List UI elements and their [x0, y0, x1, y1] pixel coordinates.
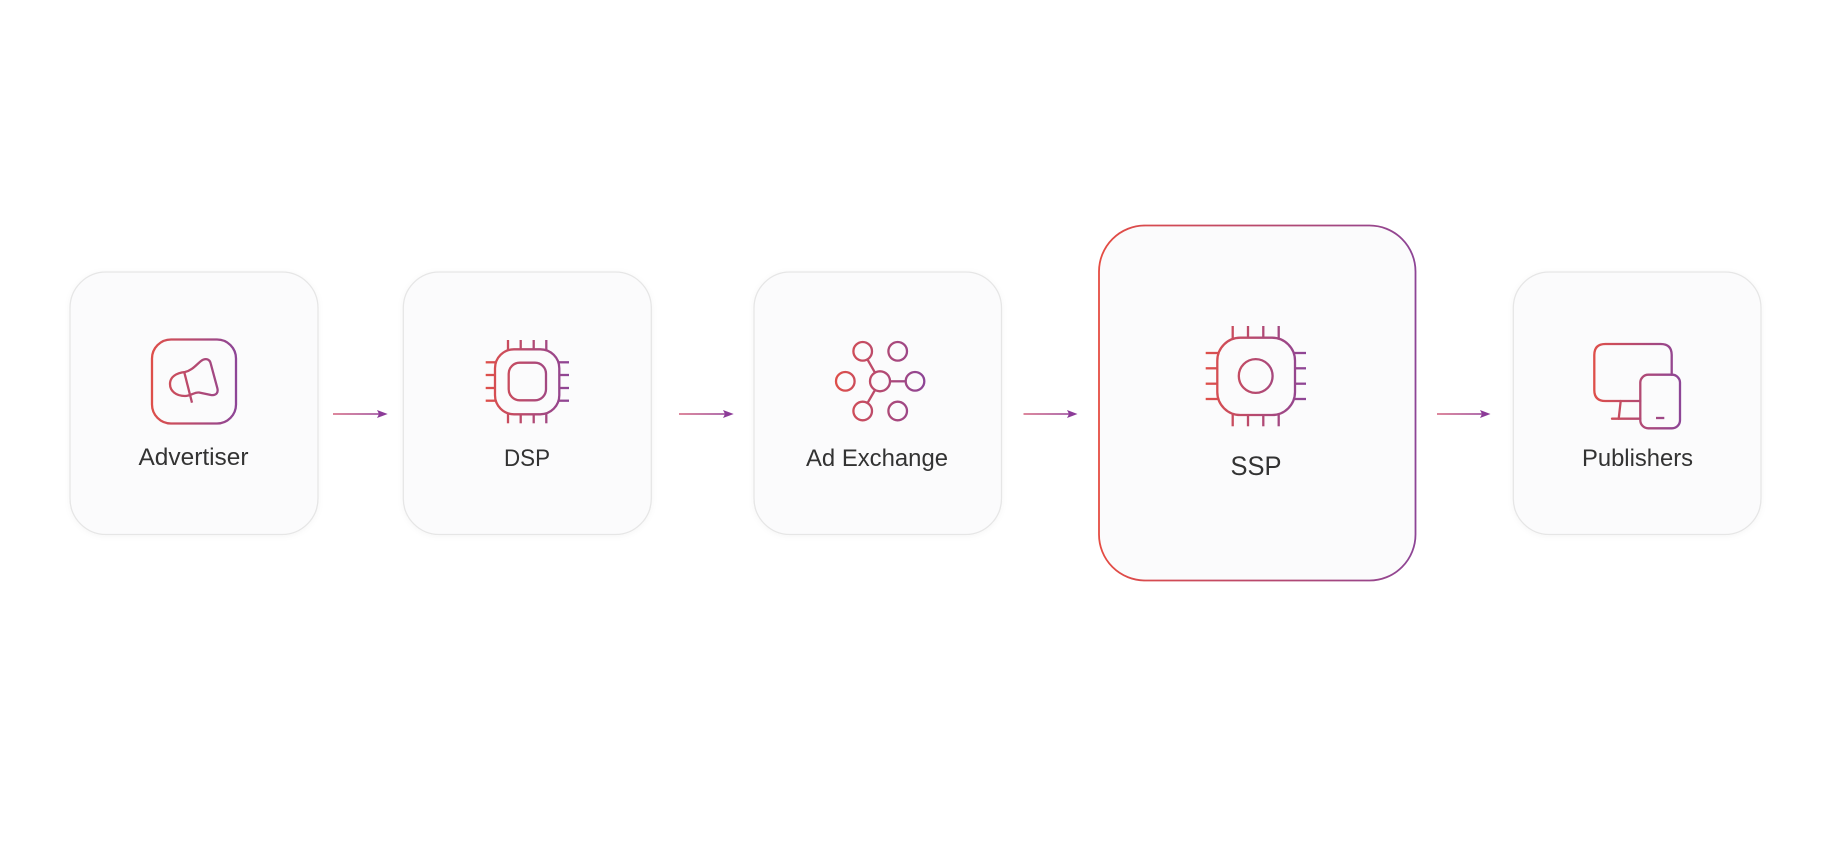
- label: Ad Exchange: Ad Exchange: [806, 445, 948, 472]
- card background: [1513, 272, 1761, 534]
- panel: Ad Exchange: [754, 272, 1002, 534]
- icon: monitor and tablet: [1594, 344, 1680, 428]
- arrow: Ad Exchange to SSP: [1024, 410, 1078, 418]
- arrow: Advertiser to DSP: [333, 410, 388, 418]
- label: DSP: DSP: [504, 445, 550, 472]
- panel: SSP (highlighted): [1099, 226, 1416, 580]
- label: SSP: SSP: [1230, 451, 1282, 481]
- card background: [70, 272, 318, 534]
- icon: megaphone: [152, 340, 236, 424]
- card background: [403, 272, 651, 534]
- panel: Publishers: [1513, 272, 1761, 534]
- panel: Advertiser: [70, 272, 318, 534]
- card background with gradient border: [1099, 226, 1416, 580]
- card background: [754, 272, 1002, 534]
- icon: chip with round core: [1206, 326, 1306, 426]
- icon: network nodes: [836, 342, 924, 420]
- icon: chip with square core: [486, 340, 569, 423]
- label: Publishers: Publishers: [1582, 445, 1693, 472]
- arrow: SSP to Publishers: [1437, 410, 1490, 418]
- arrow: DSP to Ad Exchange: [679, 410, 734, 418]
- label: Advertiser: Advertiser: [138, 444, 248, 471]
- panel: DSP: [403, 272, 651, 534]
